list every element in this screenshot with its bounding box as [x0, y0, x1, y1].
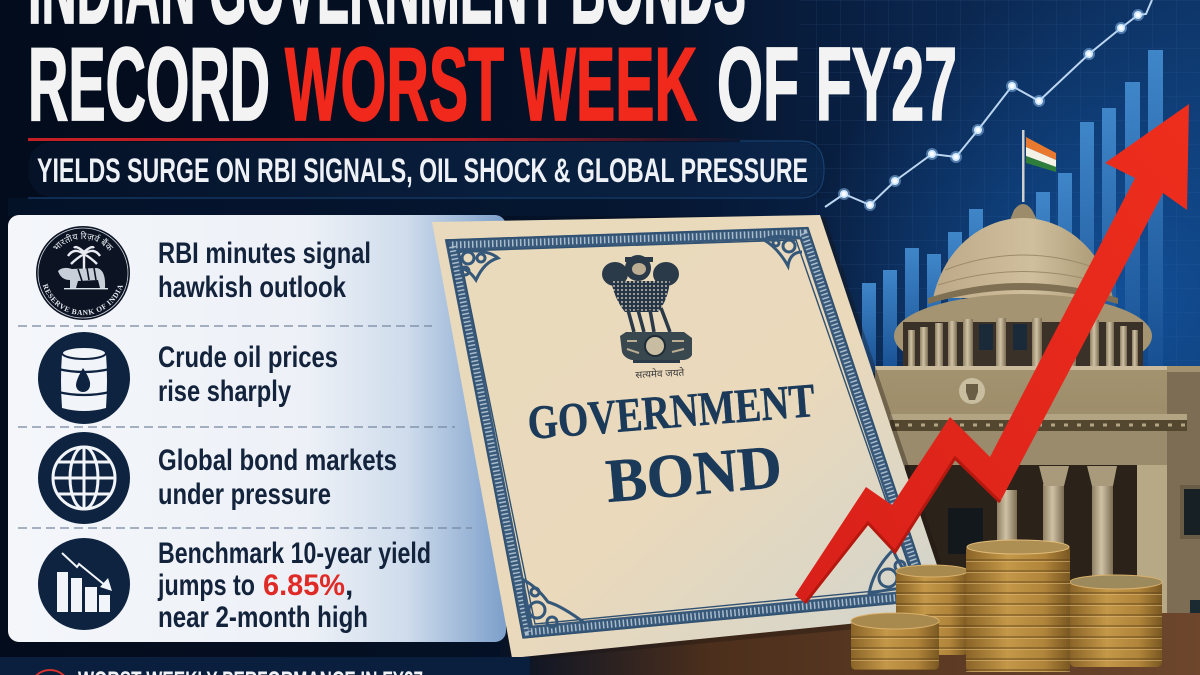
text: benchmark yield: Benchmark 10-year yield	[158, 537, 431, 570]
coin stack 2	[896, 565, 968, 655]
heading: government bond: GOVERNMENT	[526, 374, 817, 450]
emblem on facade	[959, 378, 985, 404]
text: crude oil: Crude oil prices	[158, 341, 338, 374]
subtitle banner	[28, 138, 824, 198]
icon: Reserve Bank of India seal: RESERVE BANK OF INDIA	[42, 283, 124, 316]
text: RBI minutes	[158, 237, 371, 304]
bottom banner	[0, 657, 530, 675]
red rising arrow	[795, 104, 1189, 603]
dome	[894, 204, 1152, 378]
title	[28, 0, 957, 143]
text: RBI minutes: RBI minutes signal	[158, 237, 371, 270]
parliament building	[875, 130, 1200, 616]
flag of India	[1022, 130, 1056, 202]
colonnade	[903, 318, 1143, 368]
title: OF FY27	[717, 27, 957, 143]
icon: oil barrel	[38, 332, 130, 424]
text: crude oil	[158, 341, 338, 408]
ornamental border	[447, 228, 932, 638]
emblem: national lion capital: सत्यमेव जयते	[635, 367, 685, 381]
coin stack 1	[851, 613, 939, 670]
text: global bond markets: under pressure	[158, 478, 331, 511]
icon: Reserve Bank of India seal: भारतीय रिज़र्व बैंक	[53, 231, 114, 250]
heading: government bond	[526, 374, 817, 516]
title: RECORD	[28, 27, 270, 143]
title: WORST WEEK	[285, 27, 697, 143]
icon: falling bar chart	[38, 538, 130, 630]
text: benchmark yield	[157, 537, 431, 634]
icon: Reserve Bank of India seal	[36, 226, 130, 320]
coin stack 3	[966, 540, 1070, 672]
icon: globe	[38, 432, 130, 524]
text: RBI minutes: hawkish outlook	[158, 271, 346, 304]
text: crude oil: rise sharply	[158, 375, 291, 408]
wooden table	[500, 613, 1200, 675]
emblem: national lion capital	[602, 255, 692, 381]
subtitle banner: YIELDS SURGE ON RBI SIGNALS, OIL SHOCK & GLOBAL PRESSURE	[37, 152, 808, 190]
text: benchmark yield: jumps to	[157, 569, 255, 602]
text: benchmark yield: near 2-month high	[158, 601, 368, 634]
text: benchmark yield: 6.85%	[263, 569, 345, 602]
coin stack 4	[1070, 575, 1162, 667]
panel: causes	[8, 215, 506, 642]
main facade	[875, 366, 1200, 616]
text: benchmark yield: ,	[345, 569, 353, 602]
coin stacks	[851, 540, 1162, 672]
text: global bond markets	[158, 444, 397, 511]
line chart: rising yields	[825, 0, 1152, 209]
government bond certificate	[432, 215, 943, 661]
heading: government bond: BOND	[603, 433, 785, 516]
text: global bond markets: Global bond markets	[158, 444, 397, 477]
bar chart	[862, 50, 1163, 373]
